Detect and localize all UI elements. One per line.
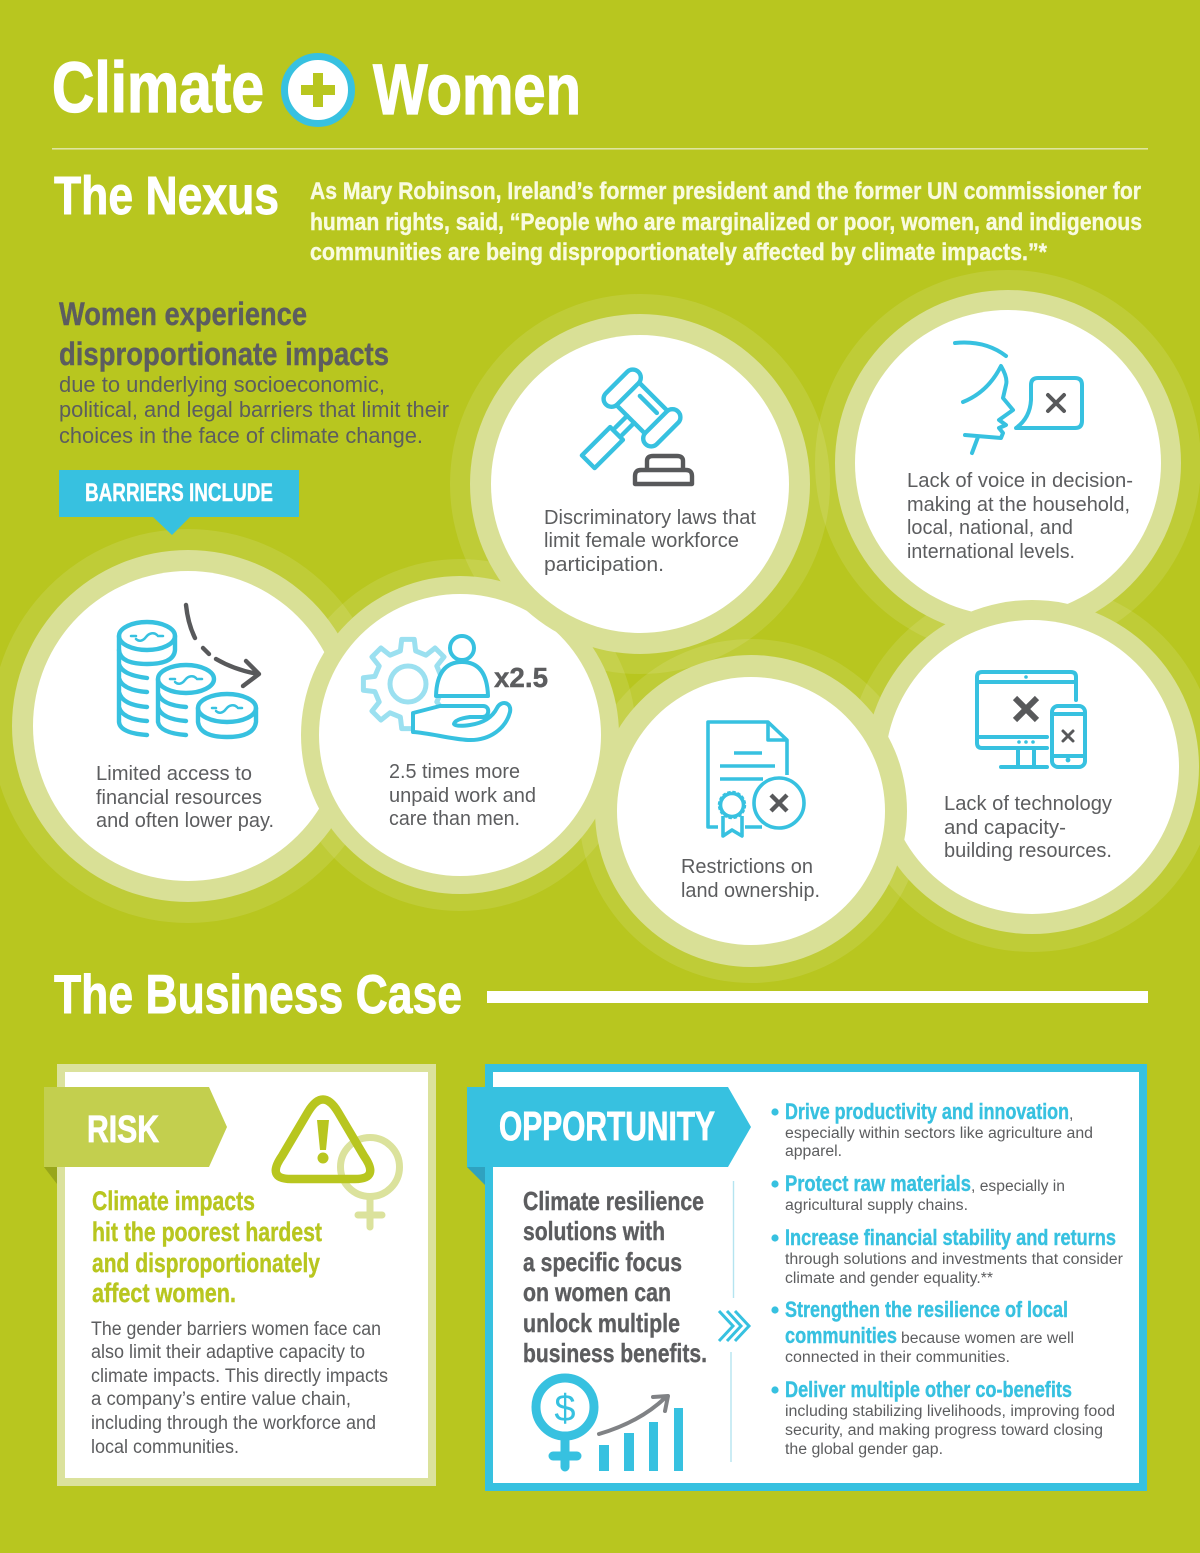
benefit: co-benefits: including stabilizing livelihoods, improving food [785,1403,1115,1420]
opportunity heading: unlock multiple [523,1308,680,1338]
icon: face with crossed speech bubble [955,343,1082,453]
benefit: productivity: , [1069,1106,1073,1123]
ribbon: risk [44,1087,227,1184]
benefit: raw materials [771,1171,1065,1214]
panel: discriminatory laws: limit female workforce [544,530,739,552]
panel: discriminatory laws: participation. [544,554,664,576]
text block: women experience disproportionate impacts: political, and legal barriers that limit their [59,397,449,422]
icon: monitor and phone crossed [977,672,1085,767]
benefit: productivity: apparel. [785,1143,842,1160]
opportunity heading: Climate resilience [523,1186,704,1216]
icon: female symbol with dollar and rising bars [536,1378,683,1471]
text block: women experience disproportionate impacts: disproportionate impacts [59,336,389,372]
panel: discriminatory laws: Discriminatory laws that [544,507,756,529]
ribbon: risk: RISK [87,1109,159,1151]
panel: unpaid work: 2.5 times more [389,761,520,783]
risk heading: and disproportionately [92,1248,320,1278]
risk body text: a company’s entire value chain, [91,1389,351,1410]
opportunity heading: a specific focus [523,1247,682,1277]
panel: lack of voice: Lack of voice in decision- [907,470,1133,492]
risk body text: local communities. [91,1437,239,1458]
ribbon: opportunity [467,1087,751,1185]
benefit: financial stability: climate and gender equality.** [785,1270,993,1287]
risk body text [91,1319,388,1458]
benefit: financial stability: Increase financial stability and returns [785,1225,1116,1250]
benefit: raw materials: agricultural supply chains. [785,1197,968,1214]
icon: gavel [563,366,692,487]
panel: lack of technology: and capacity- [944,817,1066,839]
benefit: local resilience [771,1297,1074,1366]
text block: women experience disproportionate impacts: Women experience [59,296,307,332]
benefit: productivity [771,1099,1093,1160]
panel: risk [44,1068,432,1482]
panel: land ownership: land ownership. [681,880,820,902]
text block: women experience disproportionate impacts [59,296,449,448]
benefit: financial stability: through solutions and investments that consider [785,1251,1123,1268]
heading: The Business Case: The Business Case [54,963,462,1025]
panel: opportunity [467,1068,1143,1487]
panel: unpaid work: care than men. [389,808,520,830]
risk body text: also limit their adaptive capacity to [91,1342,365,1363]
text block: women experience disproportionate impacts: due to underlying socioeconomic, [59,372,385,397]
benefit: co-benefits: security, and making progress toward closing [785,1422,1103,1439]
benefit: local resilience: connected in their communities. [785,1349,1010,1366]
benefit: raw materials: , especially in [971,1178,1065,1195]
panel: discriminatory laws [470,314,810,654]
panel: financial resources: and often lower pay. [96,810,274,832]
panel: financial resources [12,550,364,902]
risk body text: including through the workforce and [91,1413,376,1434]
panel: unpaid work: x2.5 [494,662,548,693]
panel: financial resources: financial resources [96,787,262,809]
heading: The Business Case [54,963,1148,1025]
benefit: productivity: especially within sectors like agriculture and [785,1125,1093,1142]
heading: The Nexus: The Nexus [54,166,279,226]
panel: lack of voice: making at the household, [907,494,1130,516]
panel: land ownership [595,655,907,967]
benefit: local resilience: communities [785,1323,897,1348]
title: Climate [52,49,264,128]
benefit: local resilience: because women are well [901,1330,1074,1347]
risk heading [92,1186,322,1308]
risk heading: affect women. [92,1278,236,1308]
risk heading: hit the poorest hardest [92,1217,322,1247]
benefit: co-benefits: the global gender gap. [785,1441,943,1458]
icon: land deed crossed [708,722,804,836]
risk body text: The gender barriers women face can [91,1319,381,1340]
panel: lack of voice [835,290,1181,636]
quote: Mary Robinson: communities are being disproportionately affected by climate impacts.”* [310,239,1048,266]
circle halos [0,270,1200,983]
title: Women [373,51,581,130]
panel: land ownership: Restrictions on [681,856,813,878]
quote: Mary Robinson [310,178,1142,266]
opportunity heading: on women can [523,1277,671,1307]
panel: financial resources: Limited access to [96,763,252,785]
panel: unpaid work [301,576,619,894]
panel: lack of voice: international levels. [907,541,1075,563]
panel: unpaid work: unpaid work and [389,785,536,807]
title [52,49,581,130]
panel: lack of technology: building resources. [944,840,1112,862]
panel: lack of technology [865,600,1199,934]
text block: women experience disproportionate impacts: choices in the face of climate change. [59,423,423,448]
panel: lack of technology: Lack of technology [944,793,1112,815]
panel: lack of voice: local, national, and [907,517,1073,539]
icon: plus in circle [284,56,352,124]
divider with chevrons arrow [719,1181,749,1462]
icon: coins with falling arrow [119,605,259,737]
risk body text: climate impacts. This directly impacts [91,1366,388,1387]
icon: warning triangle with female symbol [276,1100,400,1227]
benefit: co-benefits: Deliver multiple other co-benefits [785,1377,1072,1402]
callout: barriers include: BARRIERS INCLUDE [85,479,273,507]
benefit: financial stability [771,1225,1123,1287]
risk heading: Climate impacts [92,1186,255,1216]
opportunity heading [523,1186,707,1368]
benefit: co-benefits [771,1377,1115,1458]
benefit: local resilience: Strengthen the resilience of local [785,1297,1068,1322]
icon: gear, person and hand [363,636,510,740]
opportunity heading: solutions with [523,1216,665,1246]
ribbon: opportunity: OPPORTUNITY [499,1103,715,1149]
benefit: productivity: Drive productivity and innovation [785,1099,1069,1124]
opportunity heading: business benefits. [523,1338,707,1368]
icon: female symbol with dollar and rising bars: $ [554,1388,576,1430]
callout: barriers include [59,470,299,535]
benefit: raw materials: Protect raw materials [785,1171,971,1196]
